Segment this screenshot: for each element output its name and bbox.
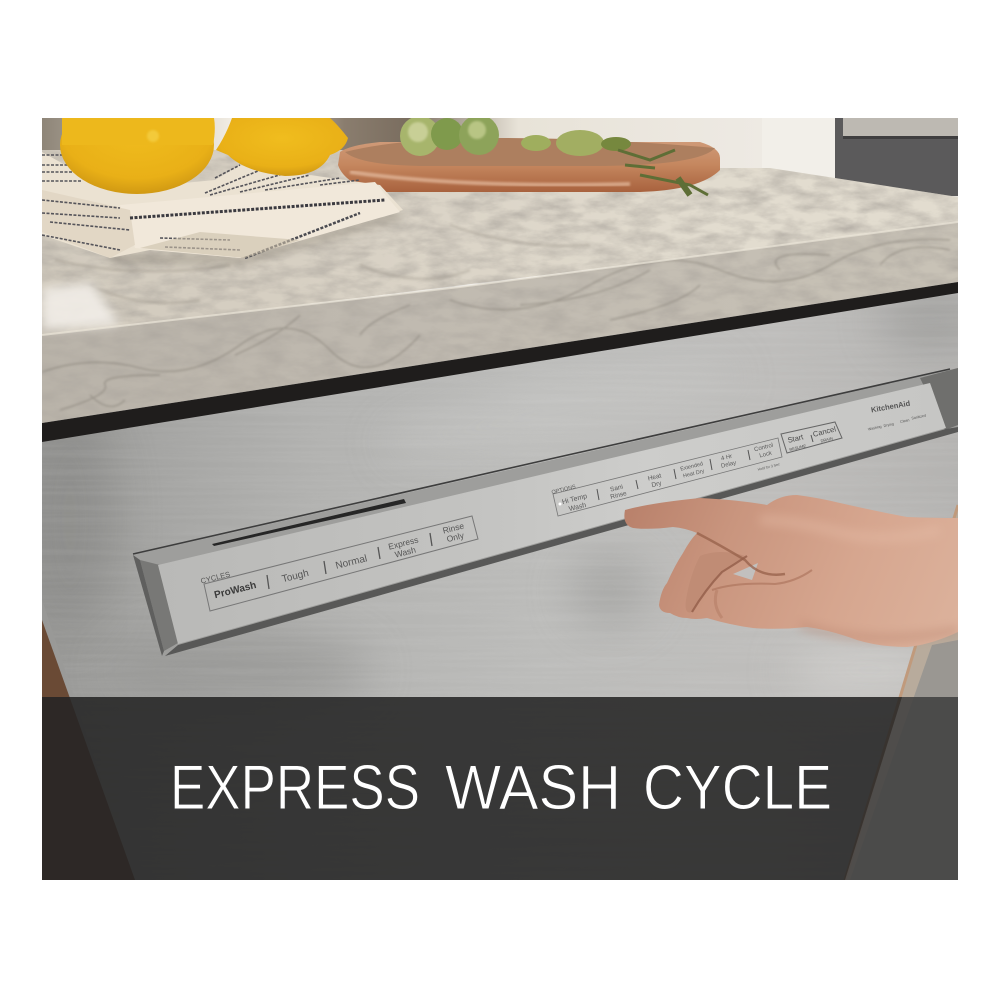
hand pressing button [624,495,958,647]
dishwasher door [42,293,958,880]
start and cancel buttons: RESUME [789,443,807,452]
start and cancel buttons: Cancel [812,424,837,439]
brand and status labels: Washing [868,425,882,431]
cycles buttons: CYCLES [200,570,231,586]
left base cabinet and right floor [42,505,958,880]
options buttons: Extended [680,461,704,473]
options buttons: 4 Hr [721,454,733,462]
caption banner [42,697,958,880]
photo: kitchen scene [42,118,958,880]
brussels sprouts [400,115,631,156]
options buttons: Sani [609,484,624,494]
control panel recess [133,368,958,656]
options buttons: Hi Temp [561,493,588,506]
panel face [158,383,946,644]
caption: express wash cycle: EXPRESS [170,753,420,823]
brand and status labels: Sanitized [911,414,926,421]
herbs [618,150,708,195]
background wall and cabinet [42,118,958,197]
towel [42,152,403,260]
floor visible through banner [845,697,958,880]
cycles buttons: Tough [281,568,310,585]
lemon right [216,118,348,176]
options buttons: Control [754,443,774,453]
options buttons: Hold for 3 Sec [757,462,780,472]
cutting board [338,138,720,192]
cycles buttons: Express [387,535,419,552]
cycles buttons [200,516,478,611]
countertop surface [42,150,958,337]
cycles buttons: Rinse [442,521,465,536]
cycles buttons: Wash [394,545,417,560]
options buttons: OPTIONS [551,484,577,496]
options buttons [551,438,782,516]
brand and status labels: KitchenAid [870,399,911,414]
options box [553,438,782,516]
caption: express wash cycle: CYCLE [643,753,832,823]
brand and status labels: Drying [883,422,894,428]
caption: express wash cycle [170,753,832,823]
caption: express wash cycle: WASH [445,753,621,823]
options buttons: Wash [568,502,587,513]
options buttons: Dry [651,480,663,489]
gap between fingers [733,563,758,580]
countertop front edge [42,222,958,423]
start and cancel buttons [781,422,842,453]
start and cancel buttons: Start [787,432,805,445]
options buttons: Delay [721,460,737,470]
cycles box [204,516,478,611]
options buttons: Heat [647,472,662,483]
brand and status labels [868,399,926,431]
cycles buttons: ProWash [213,580,258,601]
infographic: dishwasher photo illustration with caption [42,118,958,880]
options buttons: Heat Dry [683,468,705,480]
cycles buttons: Only [446,530,466,544]
stone texture [42,150,958,423]
start and cancel buttons: DRAIN [820,436,833,443]
options buttons: Lock [759,450,774,459]
options buttons: Rinse [610,490,628,501]
brand and status labels: Clean [900,418,910,424]
lemon left [60,118,215,194]
cycles buttons: Normal [334,553,368,572]
counter shadow gap [42,282,958,442]
